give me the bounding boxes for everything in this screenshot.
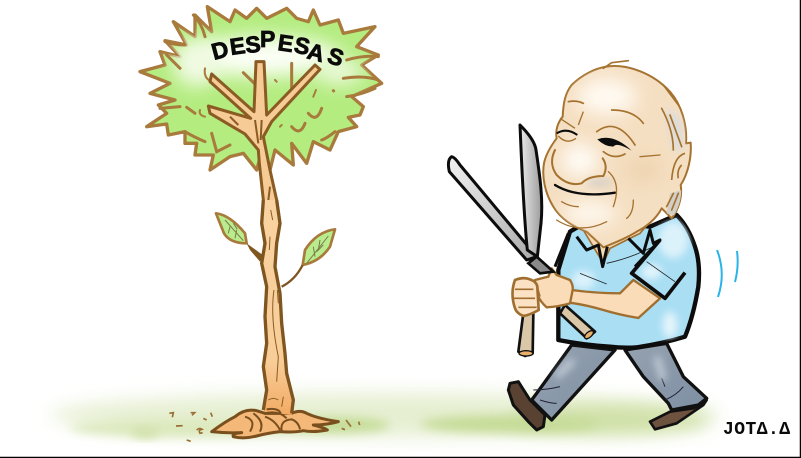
front handle end — [519, 351, 533, 356]
right shoe — [650, 400, 707, 429]
man walking with shears — [448, 61, 707, 430]
bark lines — [230, 117, 270, 208]
bark texture — [268, 210, 283, 407]
tree crown with foliage — [140, 7, 382, 213]
thumb hand — [534, 268, 573, 307]
front handle — [518, 313, 533, 356]
shirt — [558, 215, 699, 348]
legs, shoes, body and arms — [508, 215, 707, 430]
shirt fold lines and sleeve — [632, 240, 685, 298]
foliage shape — [140, 7, 382, 170]
left shoe — [508, 382, 545, 430]
cheek and chin lines — [557, 155, 660, 228]
right trouser leg — [625, 343, 707, 410]
neck — [583, 210, 660, 263]
right leaf — [282, 229, 335, 287]
left eye — [557, 131, 577, 135]
second blade — [520, 125, 542, 257]
collar — [555, 230, 660, 267]
right eye brow and socket — [568, 101, 643, 157]
nose — [552, 150, 606, 184]
left eye socket — [558, 112, 583, 141]
grass ground — [50, 393, 720, 438]
branches — [208, 62, 320, 213]
shears pivot — [528, 257, 553, 273]
trouser folds — [533, 378, 683, 403]
finger lines — [514, 285, 540, 307]
left leaf — [216, 213, 263, 262]
fist — [512, 278, 539, 316]
right eye — [597, 138, 632, 151]
rear handle end — [583, 329, 595, 340]
first blade — [448, 157, 537, 260]
foliage highlights — [173, 37, 363, 87]
motion line inner — [735, 251, 738, 282]
foliage ink marks — [160, 15, 378, 152]
mouth — [555, 185, 615, 194]
forearm — [570, 280, 660, 318]
label: despesas: DESPESAS — [209, 26, 347, 71]
motion line outer — [717, 250, 722, 297]
shears blades, collar and head — [448, 61, 691, 273]
root lines — [245, 409, 300, 432]
ear inner — [672, 153, 685, 180]
trunk fill — [262, 200, 293, 415]
signature: JOTΔ.Δ — [723, 420, 790, 440]
left trouser leg — [532, 345, 615, 420]
trouser highlights — [557, 357, 663, 380]
roots — [212, 410, 338, 438]
face shading — [562, 78, 683, 225]
shirt highlights — [572, 222, 688, 338]
hair tuft and hair lines — [603, 61, 682, 210]
tree trunk and roots — [169, 200, 360, 441]
wood chips — [169, 413, 360, 441]
trunk sides — [262, 200, 293, 413]
head — [543, 66, 691, 247]
rear shears handle — [560, 305, 595, 338]
